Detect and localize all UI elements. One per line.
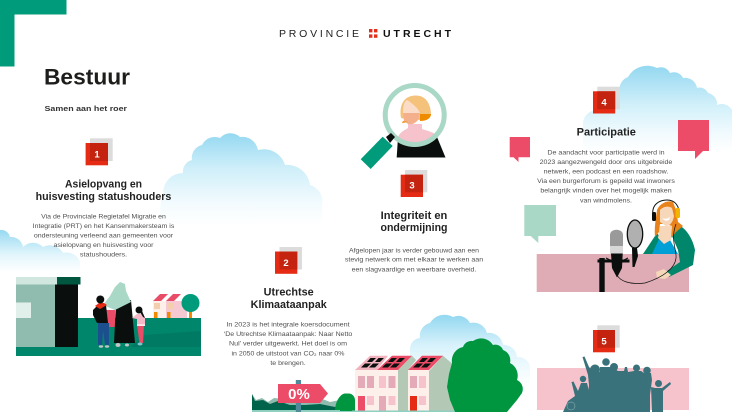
illustration: family and housing [16,277,201,356]
badge 3: 3 [409,180,415,192]
body text 2: ‘De Utrechtse Klimaataanpak: Naar Netto [224,331,353,338]
heading 3 [380,210,448,234]
section 1: asielopvang [16,138,201,356]
speech bubble: large red [678,120,709,159]
body text 3: Afgelopen jaar is verder gebouwd aan een [349,247,479,254]
cloud: left [0,230,80,272]
speech bubble: small red [510,137,530,162]
body text 4: 2023 aangezwengeld door ons uitgebreide [540,159,673,166]
body text 2: Nul’ verder uitgewerkt. Het doel is om [229,341,347,348]
illustration: landscape with 0% sign [252,380,356,412]
heading 3: ondermijning [380,222,448,234]
body text 4: netwerk, een podcast en een roadshow. [544,169,669,176]
body text 2 [224,321,353,367]
body text 2: In 2023 is het integrale koersdocument [226,321,350,328]
body text 2: te brengen. [270,360,306,367]
badge 1 [86,138,113,165]
heading 2: Klimaataanpak [251,299,327,311]
body text 4 [537,149,675,204]
section 2: klimaataanpak [224,247,523,412]
body text 4: De aandacht voor participatie werd in [547,149,665,156]
body text 1: asielopvang en huisvesting voor [54,242,154,249]
cloud: centre [160,133,322,226]
heading 4: Participatie [577,126,636,138]
badge 1: 1 [94,150,100,160]
body text 4: Via een burgerforum is gepeild wat inwoners [537,178,675,185]
illustration: landscape with 0% sign: 0% [288,386,310,403]
badge 4 [593,87,620,114]
body text 3: een slagvaardige en weerbare overheid. [352,266,477,273]
badge 5 [593,325,620,352]
subtitle: Samen aan het roer [44,104,127,113]
cloud: top right [583,66,732,152]
heading 2 [251,286,327,311]
body text 1: Via de Provinciale Regietafel Migratie en [41,214,166,220]
body text 4: van windmolens. [580,197,632,204]
body text 3: stevig netwerk om met elkaar te werken aan [345,257,484,264]
heading 1: huisvesting statushouders [36,191,171,203]
body text 1: ondersteuning verleend aan gemeenten voor [34,233,174,240]
badge 2: 2 [283,258,289,269]
logo: PROVINCIE [279,28,359,40]
illustration: magnifier with person [361,86,446,169]
heading 1: Asielopvang en [65,178,142,190]
heading 3: Integriteit en [381,210,447,222]
badge 4: 4 [601,98,607,108]
badge 3 [401,170,427,197]
body text 3 [345,247,484,273]
cloud: bottom [410,315,530,388]
illustration: podcast host [537,200,695,292]
badge 2 [275,247,302,274]
body text 1 [33,214,174,259]
section 4: participatie [510,87,709,292]
speech bubble: green [524,205,556,243]
illustration: group of people [537,356,689,412]
heading 1 [36,178,171,203]
corner accent [0,0,66,66]
illustration: solar houses and trees [340,338,523,412]
body text 2: in 2050 de uitstoot van CO₂ naar 0% [232,350,345,357]
badge 5: 5 [601,336,607,348]
title: Bestuur [44,64,130,90]
logo [279,28,452,40]
body text 4: belangrijk vinden over het mogelijk maken [540,188,672,195]
section 3: integriteit [345,86,484,273]
section 5 [537,325,689,412]
heading 2: Utrechtse [264,286,314,298]
body text 1: Integratie (PRT) en het Kansenmakersteam is [33,223,174,230]
logo: UTRECHT [383,28,452,40]
body text 1: statushouders. [80,252,127,259]
